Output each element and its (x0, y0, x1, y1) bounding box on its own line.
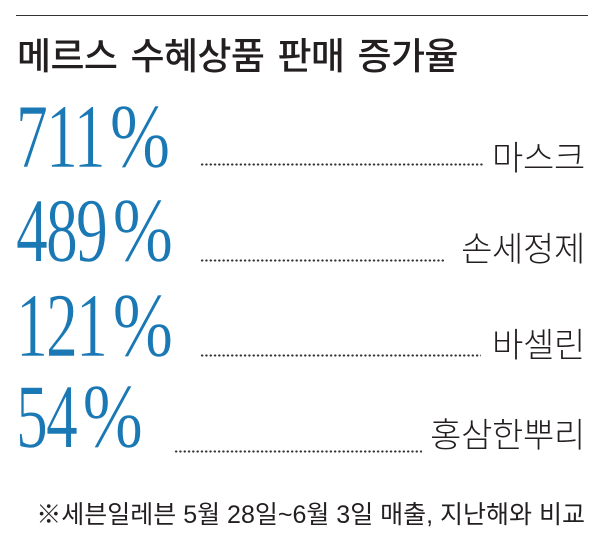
value: 54% (16, 366, 141, 467)
value: 54%: % (82, 366, 141, 467)
leader dots (200, 259, 444, 262)
leader dots (174, 450, 422, 453)
row: mask (16, 86, 585, 187)
label: vaseline: 바셀린 (492, 327, 585, 365)
leader dots (200, 163, 484, 166)
value: 711%: 711 (16, 86, 104, 187)
row: red ginseng (16, 366, 585, 467)
value: 54%: 54 (16, 366, 76, 467)
value: 121%: % (112, 275, 171, 376)
value: 121%: 121 (16, 275, 106, 376)
title: 메르스 수혜상품 판매 증가율 (17, 36, 458, 77)
value: 711%: % (110, 86, 168, 187)
label: red ginseng: 홍삼한뿌리 (430, 417, 585, 455)
label: sanitizer: 손세정제 (461, 231, 585, 269)
value: 711% (16, 86, 168, 187)
label: mask: 마스크 (492, 140, 585, 178)
footnote: ※세븐일레븐 5월 28일~6월 3일 매출, 지난해와 비교 (36, 501, 585, 529)
top rule (16, 15, 588, 16)
value: 489% (16, 180, 171, 281)
row: vaseline (16, 275, 585, 376)
value: 489%: 489 (16, 180, 106, 281)
value: 489%: % (112, 180, 171, 281)
leader dots (200, 354, 481, 357)
row: hand sanitizer (16, 180, 585, 281)
value: 121% (16, 275, 171, 376)
